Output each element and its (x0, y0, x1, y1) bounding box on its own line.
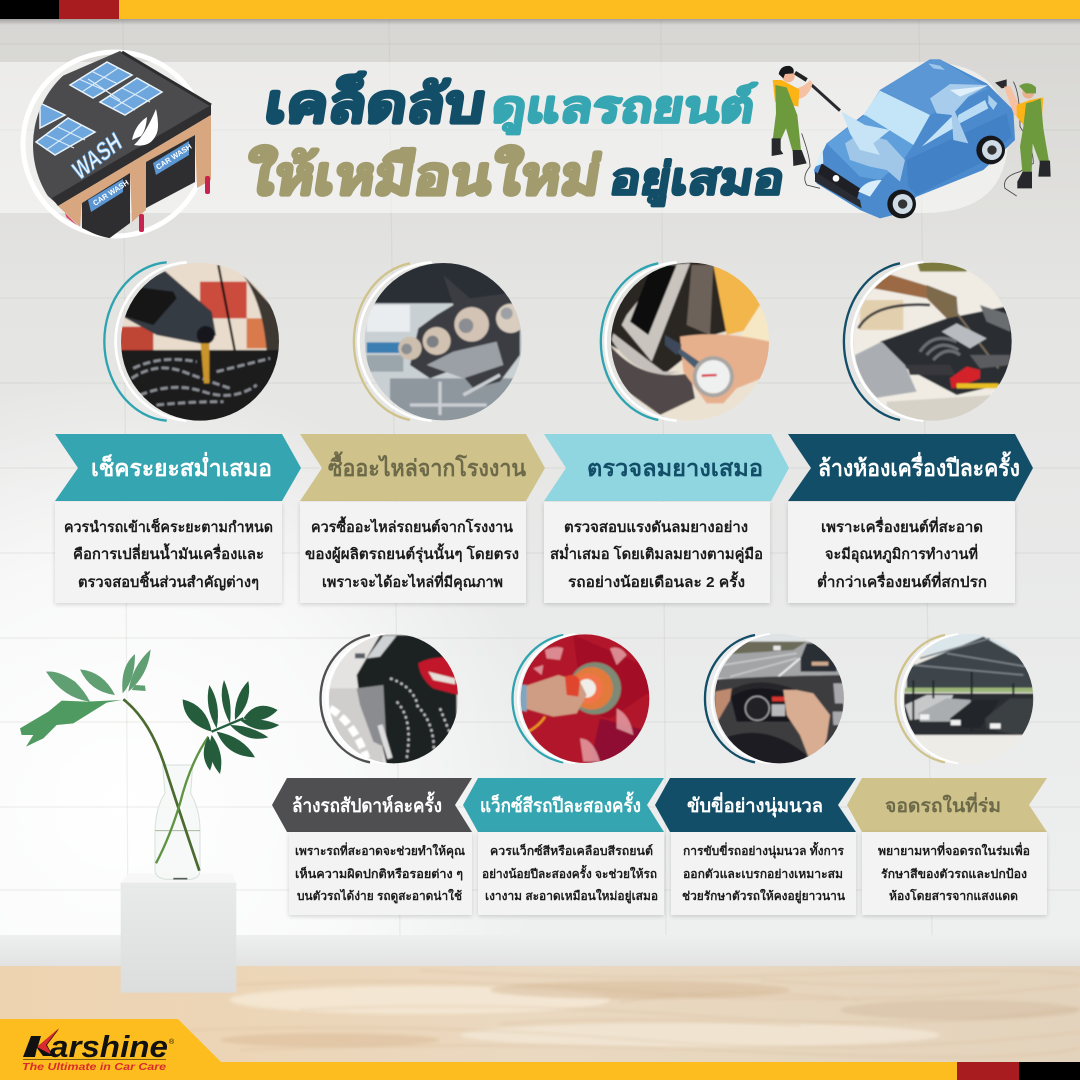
title: อยู่เสมอ (606, 155, 788, 206)
text block: สม่ำเสมอ โดยเติมลมยางตามคู่มือ (550, 543, 763, 564)
heading: ขับขี่อย่างนุ่มนวล (687, 792, 823, 818)
heading: ล้างห้องเครื่องปีละครั้ง (818, 451, 1020, 481)
glass vase (155, 765, 200, 879)
heading (544, 434, 789, 501)
heading: ซื้ออะไหล่จากโรงงาน (328, 451, 526, 481)
car body (814, 59, 1015, 218)
baseboard (0, 935, 1080, 967)
worker right (995, 79, 1051, 196)
illustration: washing a blue car (772, 59, 1051, 218)
panel: drive gently (655, 778, 856, 915)
step 6 photo: waxing (512, 632, 652, 765)
text block: ห้องโดยสารจากแสงแดด (889, 888, 1018, 903)
text block: อย่างน้อยปีละสองครั้ง จะช่วยให้รถ (482, 864, 657, 881)
heading (300, 434, 545, 501)
white block (121, 873, 236, 993)
heading: จอดรถในที่ร่ม (885, 792, 1001, 817)
heading (463, 778, 664, 832)
heading: ตรวจลมยางเสมอ (587, 455, 763, 481)
step 2 photo: spare parts (354, 262, 525, 425)
text block: เพราะเครื่องยนต์ที่สะอาด (821, 516, 983, 536)
icon: car wash building: CAR WASH (154, 142, 193, 172)
text block: ของผู้ผลิตรถยนต์รุ่นนั้นๆ โดยตรง (305, 543, 519, 564)
title: เคล็ดลับ (261, 72, 490, 134)
step 8 photo: covered parking (896, 632, 1037, 765)
text block (671, 832, 856, 915)
panel: regular service check (55, 434, 301, 603)
step 4 photo: engine bay (844, 262, 1013, 425)
stems (123, 699, 199, 871)
step 1 photo: oil change (104, 262, 280, 423)
text block (544, 502, 770, 603)
text block: จะมีอุณหภูมิการทำงานที่ (825, 543, 978, 564)
icon: car wash building: CAR WASH (91, 178, 130, 208)
title (241, 72, 788, 206)
text block: ควรแว็กซ์สีหรือเคลือบสีรถยนต์ (490, 843, 653, 858)
panel: check tyre pressure (544, 434, 789, 603)
heading: ล้างรถสัปดาห์ละครั้ง (292, 791, 442, 817)
text block: รถอย่างน้อยเดือนละ 2 ครั้ง (568, 571, 745, 591)
text block: เงางาม สะอาดเหมือนใหม่อยู่เสมอ (485, 888, 658, 904)
heading (55, 434, 301, 501)
text block (788, 502, 1015, 603)
heading (788, 434, 1033, 501)
icon: car wash building (23, 51, 211, 240)
text block (55, 502, 282, 603)
text block: ตรวจสอบชิ้นส่วนสำคัญต่างๆ (78, 571, 259, 591)
text block: บนตัวรถได้ง่าย รถดูสะอาดน่าใช้ (297, 888, 462, 904)
heading (847, 778, 1047, 832)
logo: Karshine: The Ultimate in Car Care (22, 1061, 166, 1073)
panel: wax twice a year (463, 778, 664, 915)
step 7 photo: gentle driving (705, 632, 847, 765)
text block: คือการเปลี่ยนน้ำมันเครื่องและ (73, 543, 264, 563)
panel: weekly wash (272, 778, 472, 915)
title: ดูแลรถยนต์ (488, 82, 758, 134)
left leaves (20, 649, 151, 747)
text block (862, 832, 1047, 915)
text block: ตรวจสอบแรงดันลมยางอย่าง (564, 520, 748, 536)
text block: เห็นความผิดปกติหรือรอยต่าง ๆ (295, 866, 463, 881)
title: ให้เหมือนใหม่ (241, 145, 606, 206)
heading (655, 778, 856, 832)
logo: Karshine (22, 1028, 175, 1073)
heading: แว็กซ์สีรถปีละสองครั้ง (480, 791, 641, 817)
heading: เช็คระยะสม่ำเสมอ (91, 451, 272, 481)
logo: Karshine: ® (169, 1038, 175, 1046)
text block: ควรนำรถเข้าเช็คระยะตามกำหนด (64, 517, 273, 536)
top colour bar (0, 0, 1080, 25)
wooden floor (0, 966, 1080, 1066)
header band (0, 62, 1008, 213)
text block: การขับขี่รถอย่างนุ่มนวล ทั้งการ (683, 841, 845, 859)
right leaves (183, 680, 279, 774)
step 5 photo: car wash (321, 632, 460, 765)
text block: ต่ำกว่าเครื่องยนต์ที่สกปรก (817, 571, 987, 591)
worker left (772, 66, 840, 188)
text block: รักษาสีของตัวรถและปกป้อง (881, 867, 1027, 881)
heading (272, 778, 472, 832)
panel: park in the shade (847, 778, 1047, 915)
icon: car wash building: WASH (69, 127, 126, 186)
step 3 photo: tyre pressure gauge (601, 262, 773, 425)
panel: buy factory parts (300, 434, 545, 603)
logo: Karshine: arshine (50, 1029, 168, 1064)
text block: ควรซื้ออะไหล่รถยนต์จากโรงงาน (311, 516, 513, 536)
bottom colour bar (0, 1019, 1080, 1080)
panel: wash engine bay yearly (788, 434, 1033, 603)
text block: เพราะจะได้อะไหล่ที่มีคุณภาพ (322, 571, 503, 591)
plant in glass vase on white block (20, 649, 279, 993)
text block: เพราะรถที่สะอาดจะช่วยทำให้คุณ (295, 842, 465, 859)
text block: ออกตัวและเบรกอย่างเหมาะสม (683, 867, 843, 881)
text block: พยายามหาที่จอดรถในร่มเพื่อ (878, 842, 1030, 858)
text block (300, 502, 526, 603)
text block: ช่วยรักษาตัวรถให้คงอยู่ยาวนาน (682, 888, 846, 904)
text block (478, 832, 664, 915)
text block (289, 832, 472, 915)
